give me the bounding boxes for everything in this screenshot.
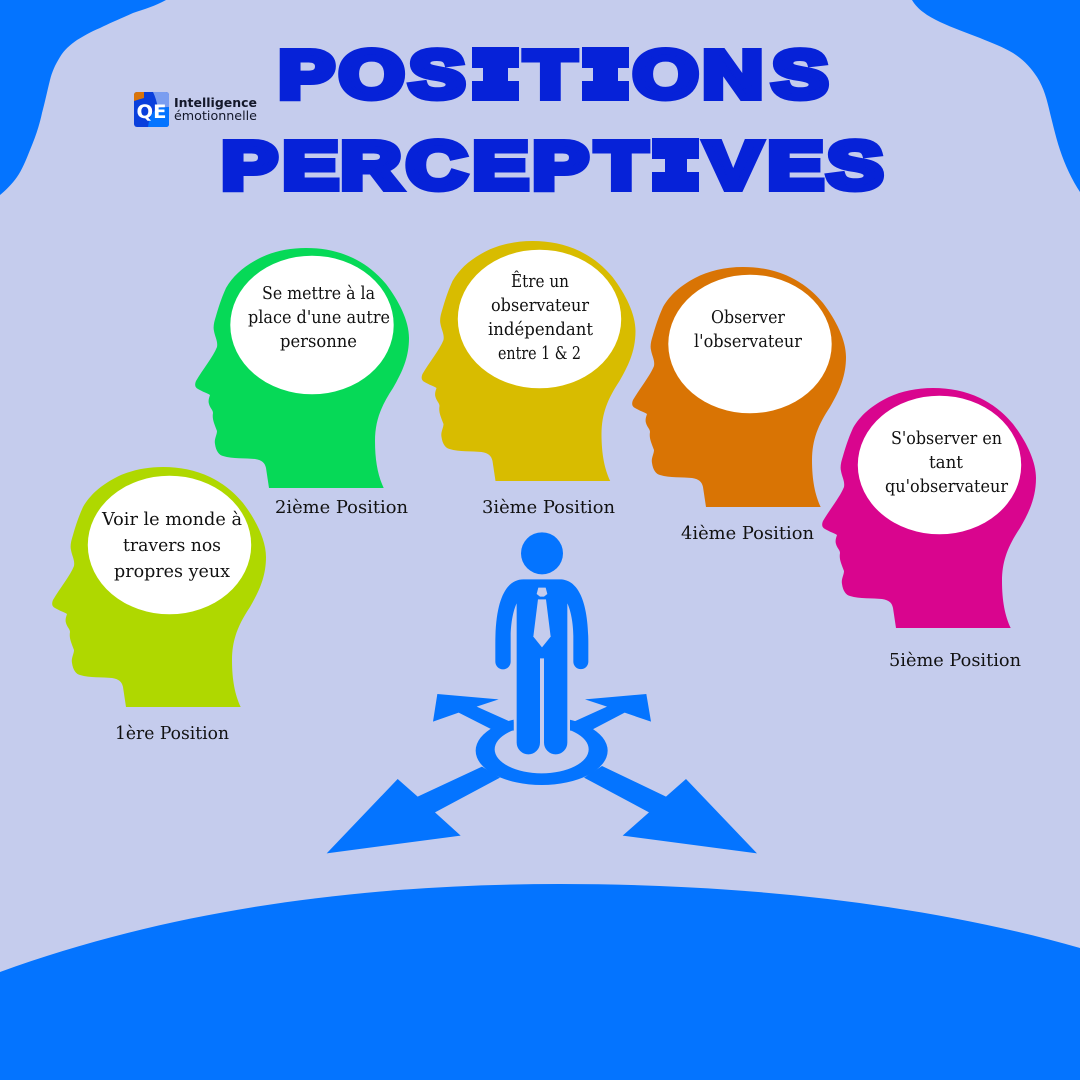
- logo: Intelligence émotionnelle: émotionnelle: [174, 108, 257, 123]
- logo: Intelligence émotionnelle: Intelligence: [174, 95, 257, 110]
- ring: [476, 716, 608, 785]
- label 4: 4ième Position: [681, 523, 814, 544]
- thought bubble 4: [668, 275, 832, 413]
- label 1: 1ère Position: [115, 723, 229, 744]
- bubble text 5: S'observer en: [891, 428, 1002, 449]
- arrow: back right: [570, 694, 651, 731]
- head: orange: [632, 267, 846, 507]
- person head: [521, 532, 563, 574]
- position 5: [822, 388, 1036, 671]
- bubble text 5: [885, 428, 1008, 497]
- position 2: [195, 248, 409, 518]
- bubble text 5: qu'observateur: [885, 476, 1008, 497]
- head: magenta: [822, 388, 1036, 628]
- thought bubble 2: [230, 256, 394, 394]
- bubble text 2: place d'une autre: [248, 307, 390, 328]
- top right corner shape: [912, 0, 1080, 192]
- bottom arc shape: [0, 884, 1080, 1080]
- head: green-yellow: [52, 467, 266, 707]
- bubble text 2: [248, 283, 390, 352]
- bubble text 3: [488, 269, 594, 364]
- bubble text 1: propres yeux: [114, 561, 230, 582]
- bubble text 3: observateur: [491, 295, 589, 316]
- thought bubble 3: [458, 250, 621, 388]
- bubble text 2: personne: [280, 331, 357, 352]
- arrow: front left: [327, 767, 500, 853]
- thought bubble 1: [88, 476, 251, 614]
- position 3: [422, 241, 636, 518]
- tie: [533, 588, 551, 647]
- logo: Intelligence émotionnelle: [134, 92, 257, 127]
- label 3: 3ième Position: [482, 497, 615, 518]
- top left corner shape: [0, 0, 166, 195]
- bubble text 4: Observer: [711, 307, 785, 328]
- bubble text 2: Se mettre à la: [262, 283, 375, 304]
- figure at crossroads: [327, 532, 757, 853]
- arrow: front right: [584, 766, 757, 853]
- title: [222, 37, 883, 204]
- bubble text 3: indépendant: [488, 319, 594, 340]
- bubble text 1: Voir le monde à: [101, 509, 242, 530]
- bubble text 1: travers nos: [123, 535, 221, 556]
- position 4: [632, 267, 846, 544]
- bubble text 1: [101, 509, 242, 582]
- person body: [495, 579, 588, 754]
- head: yellow: [422, 241, 636, 481]
- title: PERCEPTIVES: [221, 128, 883, 204]
- bubble text 4: [694, 307, 802, 352]
- label 5: 5ième Position: [889, 650, 1021, 671]
- arrow: back left: [433, 694, 514, 731]
- title: POSITIONS: [279, 37, 828, 113]
- gap behind legs: [514, 700, 570, 731]
- logo mark: QE: [136, 101, 166, 123]
- bubble text 3: entre 1 & 2: [498, 343, 581, 364]
- position 1: [52, 467, 266, 744]
- bubble text 4: l'observateur: [694, 331, 802, 352]
- bubble text 5: tant: [929, 452, 964, 473]
- label 2: 2ième Position: [275, 497, 408, 518]
- thought bubble 5: [858, 396, 1021, 534]
- head: green: [195, 248, 409, 488]
- bubble text 3: Être un: [511, 269, 569, 292]
